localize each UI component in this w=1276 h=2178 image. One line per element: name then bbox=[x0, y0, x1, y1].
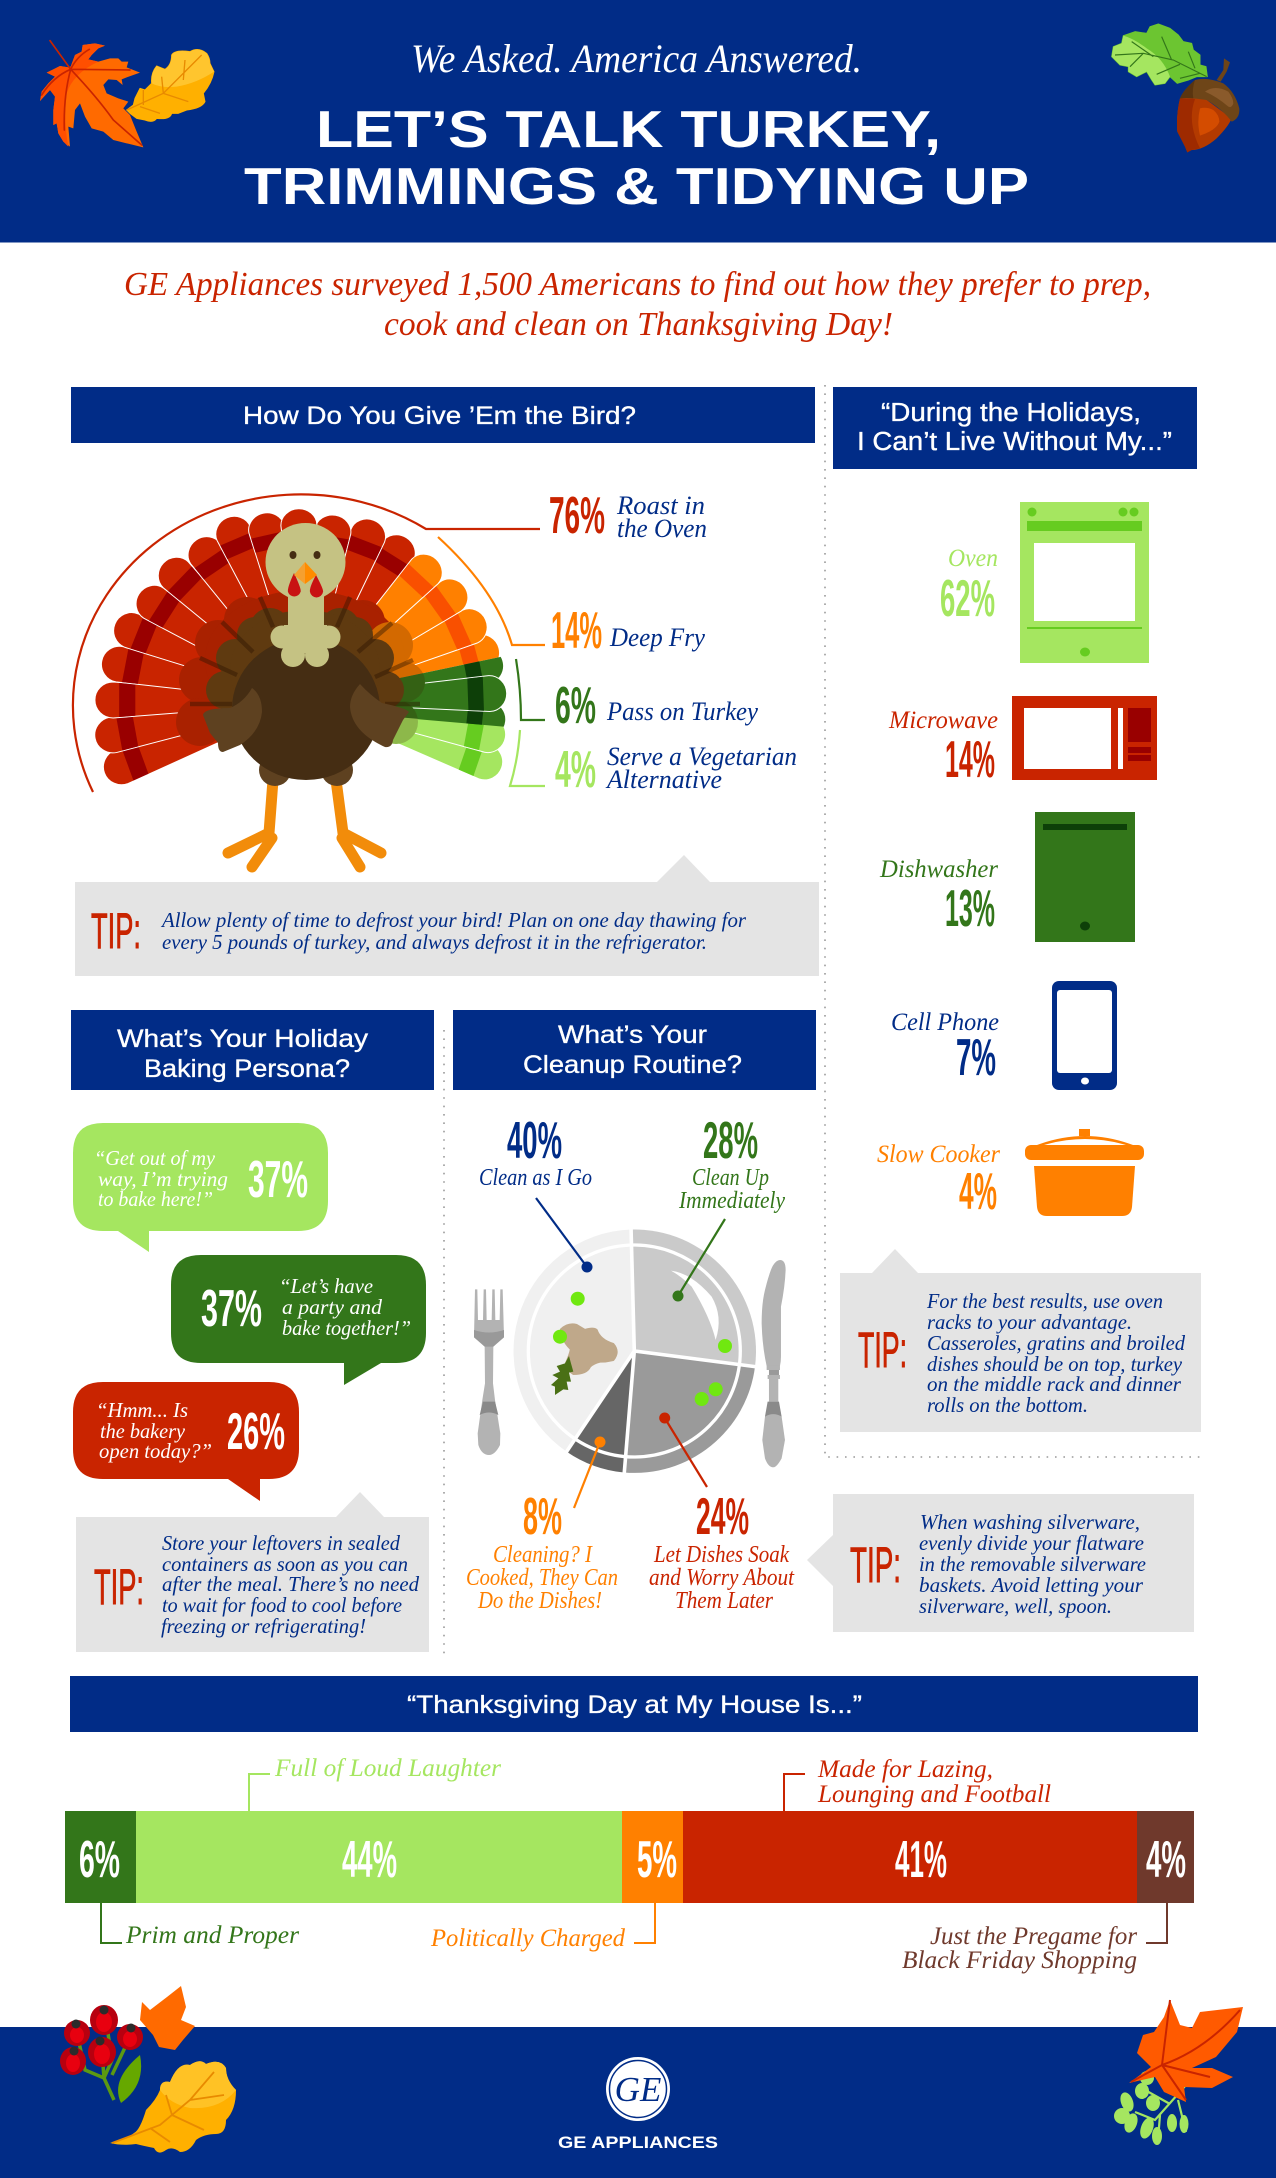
callout: 6 percent pass on turkey: 6% bbox=[555, 677, 596, 735]
speech bubble: 37 percent party: bake together!” bbox=[282, 1316, 411, 1340]
label: 24 percent let dishes soak bbox=[649, 1412, 795, 1614]
callout: 76 percent roast in the oven bbox=[73, 487, 707, 792]
speech bubble: 37 percent get out of my way: 37% bbox=[248, 1151, 308, 1209]
label: 8 percent cleaning bbox=[466, 1436, 618, 1614]
speech bubble: 26 percent bakery bbox=[73, 1382, 299, 1501]
stacked bar chart: 41% bbox=[895, 1831, 947, 1889]
tip: leftovers: TIP: bbox=[94, 1559, 144, 1615]
heading bbox=[71, 1010, 434, 1090]
oven 62 percent: Oven bbox=[948, 545, 998, 572]
cell phone 7 percent: Cell Phone bbox=[891, 1009, 999, 1036]
callout: 14 percent deep fry: 14% bbox=[551, 602, 602, 660]
microwave 14 percent: 14% bbox=[945, 731, 995, 789]
icon: acorn bbox=[1177, 58, 1239, 152]
icon: small orange leaf bbox=[140, 1986, 195, 2050]
label: prim and proper: Prim and Proper bbox=[125, 1922, 299, 1949]
label: 24 percent let dishes soak: Let Dishes Soak bbox=[653, 1542, 789, 1568]
label: politically charged: Politically Charged bbox=[430, 1925, 625, 1952]
brand name: GE APPLIANCES bbox=[558, 2133, 718, 2152]
slow cooker 4 percent bbox=[877, 1129, 1144, 1221]
heading: “During the Holidays, bbox=[881, 399, 1141, 427]
tip: defrost: every 5 pounds of turkey, and always defrost it in the refrigerator. bbox=[162, 930, 707, 954]
tip: leftovers: Store your leftovers in sealed bbox=[162, 1531, 400, 1555]
tip: silverware: When washing silverware, bbox=[920, 1510, 1140, 1534]
tip: oven racks: Casseroles, gratins and broiled bbox=[927, 1331, 1185, 1355]
intro text: GE Appliances surveyed 1,500 Americans to find out how they prefer to prep, bbox=[124, 266, 1151, 303]
icon: orange maple leaf bbox=[40, 41, 143, 147]
icon: GE logo bbox=[606, 2057, 670, 2121]
label: 8 percent cleaning: Cleaning? I bbox=[493, 1542, 593, 1568]
icon: orange maple leaf bottom bbox=[1114, 2000, 1243, 2145]
oven 62 percent bbox=[940, 502, 1149, 663]
tip: oven racks: TIP: bbox=[858, 1322, 907, 1378]
tip: leftovers: after the meal. There’s no need bbox=[162, 1572, 419, 1596]
icon: knife bbox=[762, 1260, 786, 1467]
intro text: cook and clean on Thanksgiving Day! bbox=[384, 306, 893, 343]
label: 24 percent let dishes soak: Them Later bbox=[675, 1588, 774, 1614]
label: 24 percent let dishes soak: and Worry About bbox=[649, 1565, 795, 1591]
stacked bar chart: 6% bbox=[79, 1831, 120, 1889]
intro text bbox=[124, 266, 1151, 343]
speech bubble: 37 percent party bbox=[171, 1255, 426, 1385]
panel: baking persona bbox=[71, 1010, 434, 1652]
speech bubble: 37 percent party: a party and bbox=[282, 1295, 383, 1319]
label: pregame for black friday: Black Friday Shopping bbox=[902, 1947, 1137, 1974]
label: 8 percent cleaning: 8% bbox=[523, 1488, 562, 1546]
stacked bar chart: 4% bbox=[1146, 1831, 1186, 1889]
speech bubble: 26 percent bakery: “Hmm... Is bbox=[96, 1398, 188, 1422]
cell phone 7 percent: 7% bbox=[956, 1029, 996, 1087]
cell phone 7 percent bbox=[891, 981, 1117, 1090]
speech bubble: 37 percent get out of my way: “Get out of my bbox=[94, 1146, 216, 1170]
header band bbox=[0, 0, 1276, 242]
dishwasher 13 percent: 13% bbox=[945, 880, 995, 938]
tip: leftovers: freezing or refrigerating! bbox=[161, 1614, 366, 1638]
stacked bar chart: 5% bbox=[637, 1831, 677, 1889]
slow cooker 4 percent: 4% bbox=[959, 1163, 997, 1221]
tip: defrost bbox=[75, 855, 819, 976]
label: made for lazing: Lounging and Football bbox=[817, 1781, 1051, 1808]
callout: 4 percent vegetarian alternative: Serve a Vegetarian bbox=[607, 742, 797, 771]
icon: green oak leaf bbox=[1112, 24, 1207, 85]
tip: silverware: silverware, well, spoon. bbox=[919, 1594, 1112, 1618]
heading: Baking Persona? bbox=[144, 1055, 350, 1083]
tip: silverware bbox=[807, 1494, 1194, 1632]
icon: plate pie chart bbox=[514, 1227, 758, 1476]
tip: oven racks bbox=[840, 1249, 1201, 1432]
callout: 6 percent pass on turkey bbox=[516, 659, 758, 735]
panel: cant live without bbox=[833, 387, 1201, 1432]
label: 40 percent clean as i go: Clean as I Go bbox=[479, 1165, 592, 1191]
label: 28 percent clean up immediately bbox=[672, 1112, 785, 1302]
heading bbox=[71, 387, 815, 443]
label: 8 percent cleaning: Do the Dishes! bbox=[477, 1588, 602, 1614]
dishwasher 13 percent: Dishwasher bbox=[879, 856, 998, 883]
heading: What’s Your bbox=[558, 1021, 707, 1049]
panel: thanksgiving day at my house bbox=[65, 1676, 1198, 1974]
label: politically charged bbox=[430, 1903, 655, 1952]
speech bubble: 37 percent get out of my way bbox=[73, 1123, 328, 1252]
label: 24 percent let dishes soak: 24% bbox=[696, 1488, 749, 1546]
label: 40 percent clean as i go bbox=[479, 1112, 592, 1272]
heading: I Can’t Live Without My...” bbox=[857, 428, 1172, 456]
label: 28 percent clean up immediately: Immediately bbox=[678, 1188, 785, 1214]
label: made for lazing: Made for Lazing, bbox=[817, 1756, 993, 1783]
speech bubble: 37 percent get out of my way: to bake here!” bbox=[98, 1187, 213, 1211]
speech bubble: 37 percent get out of my way: way, I’m trying bbox=[98, 1167, 228, 1191]
tip: leftovers: to wait for food to cool before bbox=[162, 1593, 402, 1617]
speech bubble: 26 percent bakery: open today?” bbox=[99, 1439, 212, 1463]
tip: defrost: TIP: bbox=[91, 903, 141, 959]
callout: 76 percent roast in the oven: Roast in bbox=[616, 491, 705, 520]
speech bubble: 26 percent bakery: 26% bbox=[227, 1403, 285, 1461]
heading bbox=[70, 1676, 1198, 1732]
icon: GE logo: GE bbox=[615, 2070, 661, 2109]
label: full of loud laughter: Full of Loud Laughter bbox=[274, 1755, 501, 1782]
stacked bar chart bbox=[65, 1811, 1194, 1903]
label: full of loud laughter bbox=[249, 1755, 501, 1811]
oven 62 percent: 62% bbox=[940, 570, 995, 628]
main title: TRIMMINGS & TIDYING UP bbox=[244, 158, 1029, 216]
tip: silverware: evenly divide your flatware bbox=[919, 1531, 1144, 1555]
tip: leftovers bbox=[76, 1492, 429, 1652]
dishwasher 13 percent bbox=[879, 812, 1135, 942]
panel: how do you give em the bird bbox=[71, 387, 819, 976]
heading: What’s Your Holiday bbox=[117, 1025, 369, 1053]
main title: LET’S TALK TURKEY, bbox=[316, 101, 941, 159]
tip: oven racks: rolls on the bottom. bbox=[927, 1393, 1088, 1417]
panel: cleanup routine bbox=[453, 1010, 1194, 1632]
heading: Cleanup Routine? bbox=[523, 1051, 742, 1079]
speech bubble: 26 percent bakery: the bakery bbox=[100, 1419, 186, 1443]
heading: “Thanksgiving Day at My House Is...” bbox=[407, 1691, 862, 1719]
heading bbox=[833, 387, 1197, 469]
speech bubble: 37 percent party: “Let’s have bbox=[279, 1274, 373, 1298]
slow cooker 4 percent: Slow Cooker bbox=[877, 1141, 1000, 1168]
tip: leftovers: containers as soon as you can bbox=[162, 1552, 408, 1576]
label: 28 percent clean up immediately: Clean Up bbox=[692, 1165, 769, 1191]
heading: How Do You Give ’Em the Bird? bbox=[243, 402, 636, 430]
icon: turkey bbox=[92, 508, 509, 867]
tip: oven racks: on the middle rack and dinner bbox=[927, 1372, 1182, 1396]
callout: 4 percent vegetarian alternative: Alternative bbox=[605, 765, 722, 794]
callout: 14 percent deep fry bbox=[438, 537, 705, 660]
tip: silverware: TIP: bbox=[850, 1537, 901, 1593]
callout: 76 percent roast in the oven: the Oven bbox=[617, 514, 707, 543]
icon: yellow oak leaf bottom bbox=[110, 2061, 236, 2153]
label: pregame for black friday bbox=[902, 1903, 1167, 1974]
callout: 4 percent vegetarian alternative bbox=[510, 730, 797, 799]
heading bbox=[453, 1010, 816, 1090]
footer band bbox=[0, 1986, 1276, 2178]
tip: oven racks: For the best results, use oven bbox=[926, 1289, 1163, 1313]
icon: yellow oak leaf bbox=[127, 50, 214, 121]
tip: oven racks: racks to your advantage. bbox=[927, 1310, 1132, 1334]
microwave 14 percent bbox=[888, 696, 1157, 789]
speech bubble: 37 percent party: 37% bbox=[201, 1280, 262, 1338]
tip: oven racks: dishes should be on top, turkey bbox=[927, 1352, 1182, 1376]
main title bbox=[244, 101, 1029, 216]
icon: berries bbox=[60, 2005, 143, 2103]
callout: 4 percent vegetarian alternative: 4% bbox=[555, 741, 596, 799]
header tagline: We Asked. America Answered. bbox=[411, 36, 862, 81]
callout: 76 percent roast in the oven: 76% bbox=[549, 487, 605, 545]
label: pregame for black friday: Just the Pregame for bbox=[930, 1923, 1137, 1950]
callout: 14 percent deep fry: Deep Fry bbox=[609, 623, 705, 652]
label: 40 percent clean as i go: 40% bbox=[507, 1112, 562, 1170]
tip: silverware: in the removable silverware bbox=[919, 1552, 1146, 1576]
tip: silverware: baskets. Avoid letting your bbox=[919, 1573, 1144, 1597]
icon: fork bbox=[474, 1289, 504, 1455]
callout: 6 percent pass on turkey: Pass on Turkey bbox=[606, 697, 758, 726]
tip: defrost: Allow plenty of time to defrost your bird! Plan on one day thawing for bbox=[160, 908, 747, 932]
label: 8 percent cleaning: Cooked, They Can bbox=[466, 1565, 618, 1591]
label: made for lazing bbox=[784, 1756, 1051, 1811]
label: prim and proper bbox=[101, 1903, 299, 1949]
microwave 14 percent: Microwave bbox=[888, 707, 998, 734]
label: 28 percent clean up immediately: 28% bbox=[703, 1112, 758, 1170]
stacked bar chart: 44% bbox=[342, 1831, 397, 1889]
